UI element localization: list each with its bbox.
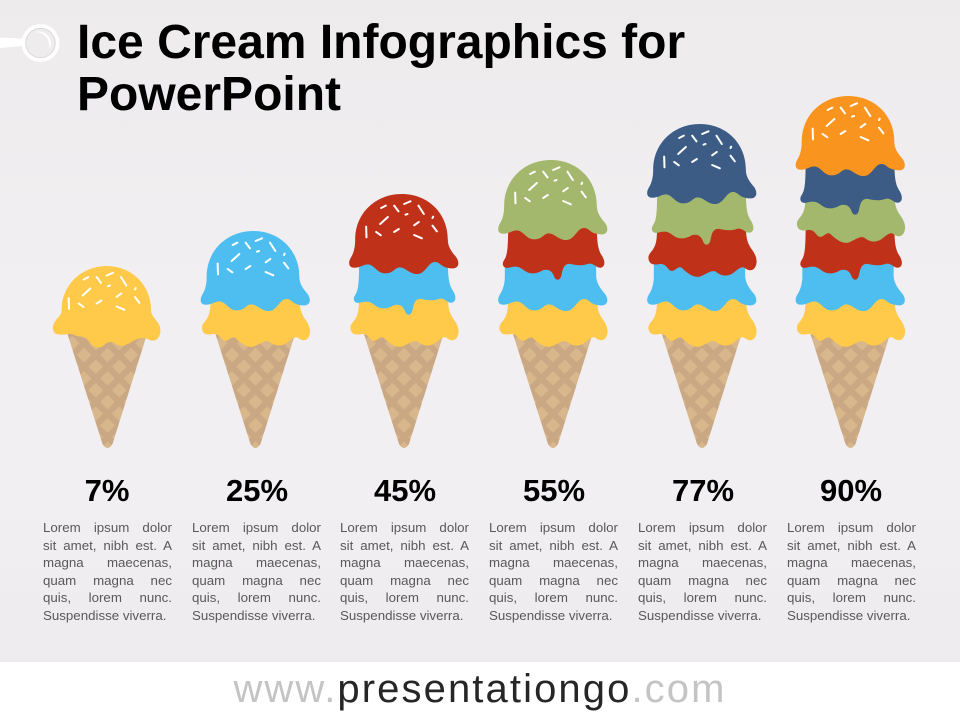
ice cream 5 [647, 124, 757, 448]
text block 6 [787, 520, 916, 622]
text block 6: magna maecenas, [787, 555, 916, 570]
footer url: www.presentationgo.com [233, 667, 727, 711]
icon: ring with ribbon [0, 24, 60, 62]
text block 2 [192, 520, 321, 622]
text block 6: Suspendisse viverra. [787, 608, 910, 622]
title: PowerPoint [77, 68, 341, 121]
ice cream 6 [796, 96, 905, 448]
text block 5: Suspendisse viverra. [638, 608, 761, 622]
text block 1: Suspendisse viverra. [43, 608, 166, 622]
text block 1: quam magna nec [43, 572, 172, 588]
text block 3: quam magna nec [340, 572, 469, 588]
text block 3 [340, 520, 469, 622]
text block 5: magna maecenas, [638, 555, 767, 570]
percentage 2: 25% [226, 473, 288, 508]
text block 2: Suspendisse viverra. [192, 608, 315, 622]
text block 6: sit amet, nibh est. A [787, 538, 916, 552]
text block 3: sit amet, nibh est. A [340, 538, 469, 552]
text block 2: sit amet, nibh est. A [192, 538, 321, 552]
text block 3: Suspendisse viverra. [340, 608, 463, 622]
text block 4 [489, 520, 618, 622]
text block 5 [638, 520, 767, 622]
text block 4: quam magna nec [489, 572, 618, 588]
title: Ice Cream Infographics for [77, 16, 685, 69]
ice cream 1 [53, 266, 160, 448]
text block 5: quis, lorem nunc. [638, 590, 767, 605]
footer [0, 662, 960, 720]
text block 5: sit amet, nibh est. A [638, 538, 767, 552]
text block 4: Suspendisse viverra. [489, 608, 612, 622]
percentage 5: 77% [672, 473, 734, 508]
text block 6: quam magna nec [787, 572, 916, 588]
percentage 6: 90% [820, 473, 882, 508]
text block 2: quam magna nec [192, 572, 321, 588]
text block 4: sit amet, nibh est. A [489, 538, 618, 552]
percentage 3: 45% [374, 473, 436, 508]
text block 2: magna maecenas, [192, 555, 321, 570]
text block 1: Lorem ipsum dolor [43, 520, 172, 535]
text block 4: Lorem ipsum dolor [489, 520, 618, 535]
text block 2: quis, lorem nunc. [192, 590, 321, 605]
text block 1: sit amet, nibh est. A [43, 538, 172, 552]
text block 1 [43, 520, 172, 622]
title [77, 16, 685, 121]
text block 6: Lorem ipsum dolor [787, 520, 916, 535]
text block 3: Lorem ipsum dolor [340, 520, 469, 535]
text block 3: magna maecenas, [340, 555, 469, 570]
ice cream 2 [201, 231, 310, 448]
ice cream 3 [349, 194, 459, 448]
text block 3: quis, lorem nunc. [340, 590, 469, 605]
text block 5: Lorem ipsum dolor [638, 520, 767, 535]
text block 2: Lorem ipsum dolor [192, 520, 321, 535]
text block 4: magna maecenas, [489, 555, 618, 570]
text block 5: quam magna nec [638, 572, 767, 588]
percentage 4: 55% [523, 473, 585, 508]
text block 4: quis, lorem nunc. [489, 590, 618, 605]
ice cream 4 [498, 160, 608, 448]
text block 6: quis, lorem nunc. [787, 590, 916, 605]
text block 1: magna maecenas, [43, 555, 172, 570]
text block 1: quis, lorem nunc. [43, 590, 172, 605]
percentage 1: 7% [85, 473, 129, 508]
